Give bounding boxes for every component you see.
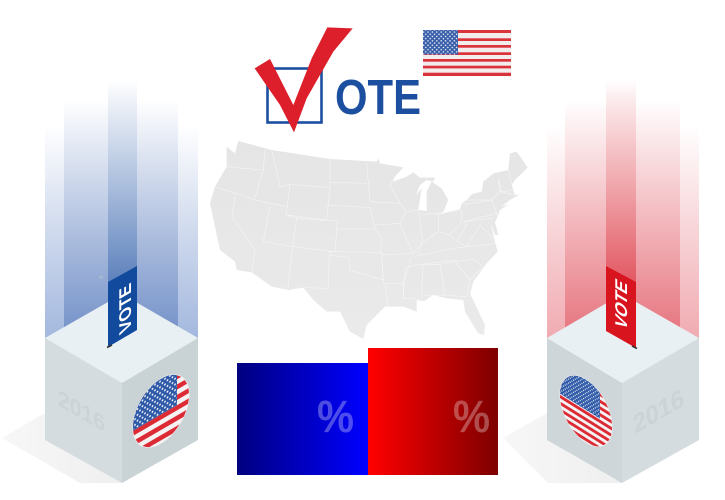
ballot box: blue <box>2 80 198 483</box>
checkbox <box>268 68 322 122</box>
box right face <box>122 338 198 483</box>
state borders <box>215 150 515 308</box>
box shadow <box>2 413 122 483</box>
box right face <box>622 338 699 483</box>
box shadow <box>503 413 622 483</box>
year label: 2016 <box>631 382 686 440</box>
year label: 2016 <box>58 386 105 438</box>
ballot slip <box>606 266 637 348</box>
map of the united states <box>210 141 528 339</box>
red check mark <box>255 27 353 132</box>
logo text: OTE <box>335 71 421 125</box>
ballot box: red <box>503 80 699 483</box>
ballot slip <box>107 266 137 348</box>
map landmass <box>210 141 528 339</box>
light beams <box>547 80 699 339</box>
percent label: % <box>317 391 354 442</box>
flag badge <box>132 374 190 448</box>
american flag <box>423 30 511 76</box>
vote logo <box>255 27 421 132</box>
small mark: tb <box>99 275 103 281</box>
percent label: % <box>453 391 490 442</box>
ballot slip: VOTE <box>115 280 135 338</box>
blue result bar <box>237 363 368 475</box>
box top <box>547 294 699 383</box>
red result bar <box>368 348 498 475</box>
box left face <box>45 338 122 483</box>
box left face <box>547 338 622 483</box>
box top <box>45 294 198 383</box>
ballot slip: VOTE <box>611 275 631 333</box>
flag badge <box>560 375 612 447</box>
light beams <box>45 80 198 339</box>
